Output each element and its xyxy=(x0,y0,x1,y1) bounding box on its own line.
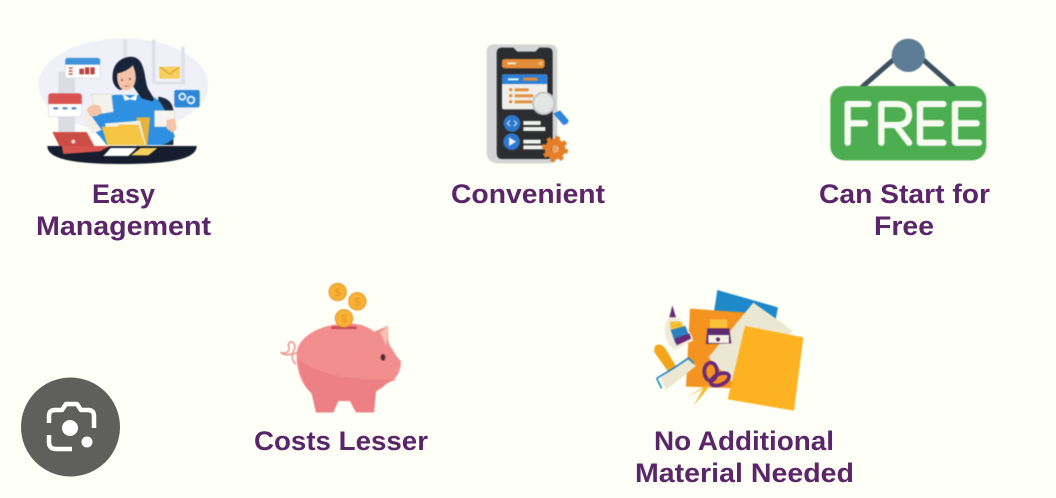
label: easy management: Management xyxy=(36,211,211,241)
label: no additional material needed xyxy=(635,426,854,488)
icon: piggy bank with coins: $ xyxy=(354,296,361,308)
icon: piggy bank with coins: $ xyxy=(335,287,342,299)
icon: piggy bank with coins xyxy=(281,283,401,412)
label: costs lesser: Costs Lesser xyxy=(254,426,428,456)
icon: convenient, smartphone with magnifier and gear xyxy=(487,44,569,163)
icon: piggy bank with coins: $ xyxy=(341,313,348,325)
label: no additional material needed: Material Needed xyxy=(635,458,854,488)
label: can start for free: Free xyxy=(874,211,934,241)
label: can start for free: Can Start for xyxy=(819,179,990,209)
label: easy management xyxy=(36,179,211,241)
label: easy management: Easy xyxy=(92,179,155,209)
label: can start for free xyxy=(819,179,990,241)
label: no additional material needed: No Additional xyxy=(654,426,834,456)
icon: free hanging sign xyxy=(830,39,986,160)
icon: craft materials, paper, glue, scissors, roller xyxy=(654,290,803,411)
label: convenient: Convenient xyxy=(451,179,605,209)
icon: easy management, woman at desk with folders xyxy=(38,38,208,164)
icon: google lens button xyxy=(21,378,120,476)
